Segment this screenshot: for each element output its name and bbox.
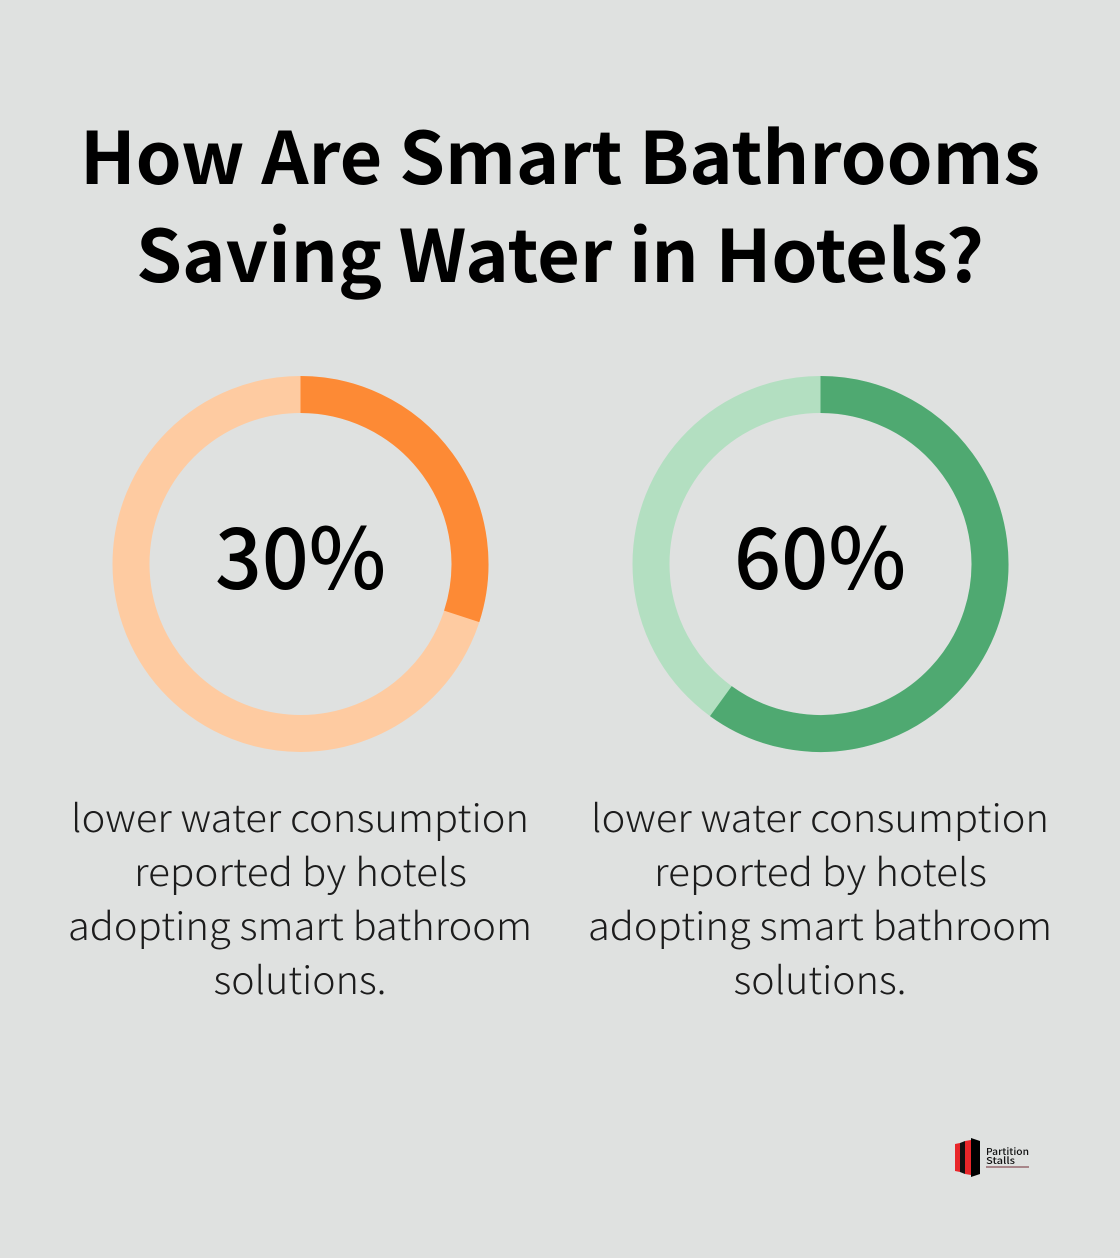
- icon: partition panels: [955, 1138, 980, 1177]
- value: 30%: 30%: [215, 491, 386, 614]
- title: How Are Smart Bathrooms: [80, 100, 1040, 205]
- title: [80, 100, 1040, 303]
- description: adopting smart bathroom: [68, 896, 532, 951]
- description: solutions.: [734, 950, 906, 1005]
- description: [588, 788, 1052, 1005]
- description: reported by hotels: [134, 842, 467, 897]
- logo text: [986, 1144, 1029, 1168]
- description: reported by hotels: [654, 842, 987, 897]
- logo text: Partition: [986, 1144, 1029, 1158]
- value: 60%: 60%: [734, 491, 906, 614]
- description: lower water consumption: [591, 788, 1049, 843]
- logo text: Stalls: [986, 1153, 1016, 1167]
- description: adopting smart bathroom: [588, 896, 1052, 951]
- donut chart: 30%: [131, 394, 470, 734]
- panel: 60% stat: [588, 394, 1052, 1005]
- panel: 30% stat: [68, 394, 532, 1005]
- donut chart: 60%: [651, 394, 990, 734]
- logo: Partition Stalls: [955, 1138, 1029, 1177]
- description: solutions.: [214, 950, 386, 1005]
- title: Saving Water in Hotels?: [136, 198, 984, 303]
- description: [68, 788, 532, 1005]
- description: lower water consumption: [71, 788, 529, 843]
